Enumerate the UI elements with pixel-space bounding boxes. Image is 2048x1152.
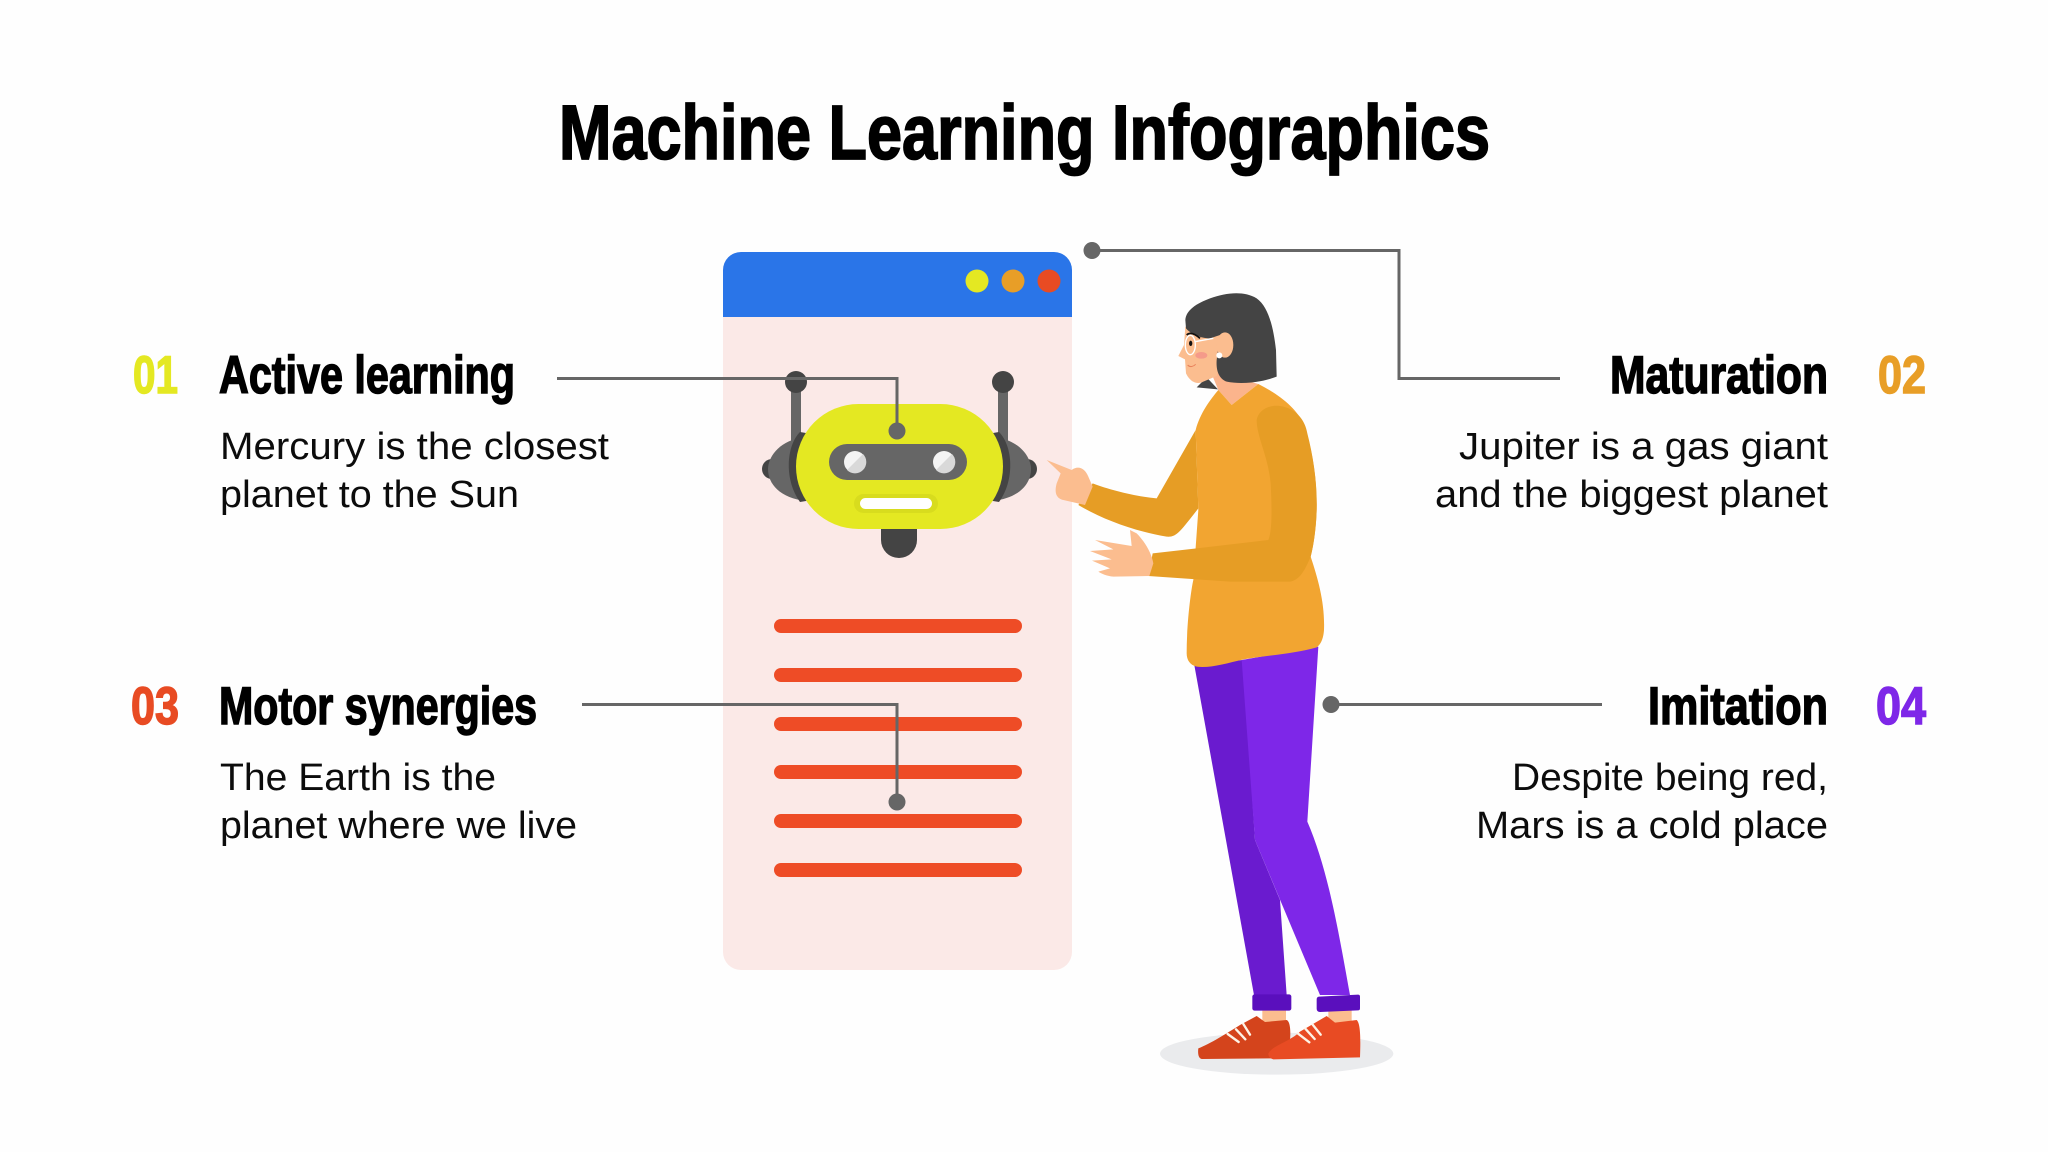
upper body bbox=[1047, 293, 1324, 667]
block 01: active learning: 01 bbox=[133, 346, 178, 405]
text lines bbox=[774, 619, 1022, 877]
block 04: imitation: Mars is a cold place bbox=[1476, 805, 1828, 847]
connector: maturation bbox=[1084, 242, 1560, 378]
connector: imitation bbox=[1322, 696, 1602, 713]
block 03: motor synergies: 03 bbox=[131, 677, 179, 736]
panel: browser window bbox=[723, 252, 1072, 970]
block 02: maturation: and the biggest planet bbox=[1435, 474, 1828, 516]
icon: robot bbox=[762, 371, 1037, 558]
connector: active learning bbox=[557, 378, 906, 440]
block 02: maturation: Jupiter is a gas giant bbox=[1459, 426, 1828, 468]
block 01: active learning: planet to the Sun bbox=[220, 474, 519, 516]
block 04: imitation: Imitation bbox=[1648, 677, 1828, 736]
block 01: active learning: Active learning bbox=[219, 346, 515, 405]
block 04: imitation: Despite being red, bbox=[1512, 757, 1828, 799]
block 01: active learning: Mercury is the closest bbox=[220, 426, 609, 468]
block 04: imitation bbox=[1476, 677, 1926, 847]
illustration: woman bbox=[1047, 293, 1393, 1075]
block 02: maturation bbox=[1435, 346, 1926, 516]
block 03: motor synergies: planet where we live bbox=[220, 805, 577, 847]
block 02: maturation: Maturation bbox=[1610, 346, 1828, 405]
legs and shoes bbox=[1160, 647, 1393, 1075]
block 01: active learning bbox=[133, 346, 609, 516]
block 03: motor synergies: The Earth is the bbox=[220, 757, 496, 799]
connector: motor synergies bbox=[582, 704, 906, 810]
block 03: motor synergies bbox=[131, 677, 577, 847]
block 03: motor synergies: Motor synergies bbox=[219, 677, 537, 736]
block 02: maturation: 02 bbox=[1878, 346, 1926, 405]
block 04: imitation: 04 bbox=[1876, 677, 1926, 736]
title: Machine Learning Infographics bbox=[559, 90, 1490, 176]
